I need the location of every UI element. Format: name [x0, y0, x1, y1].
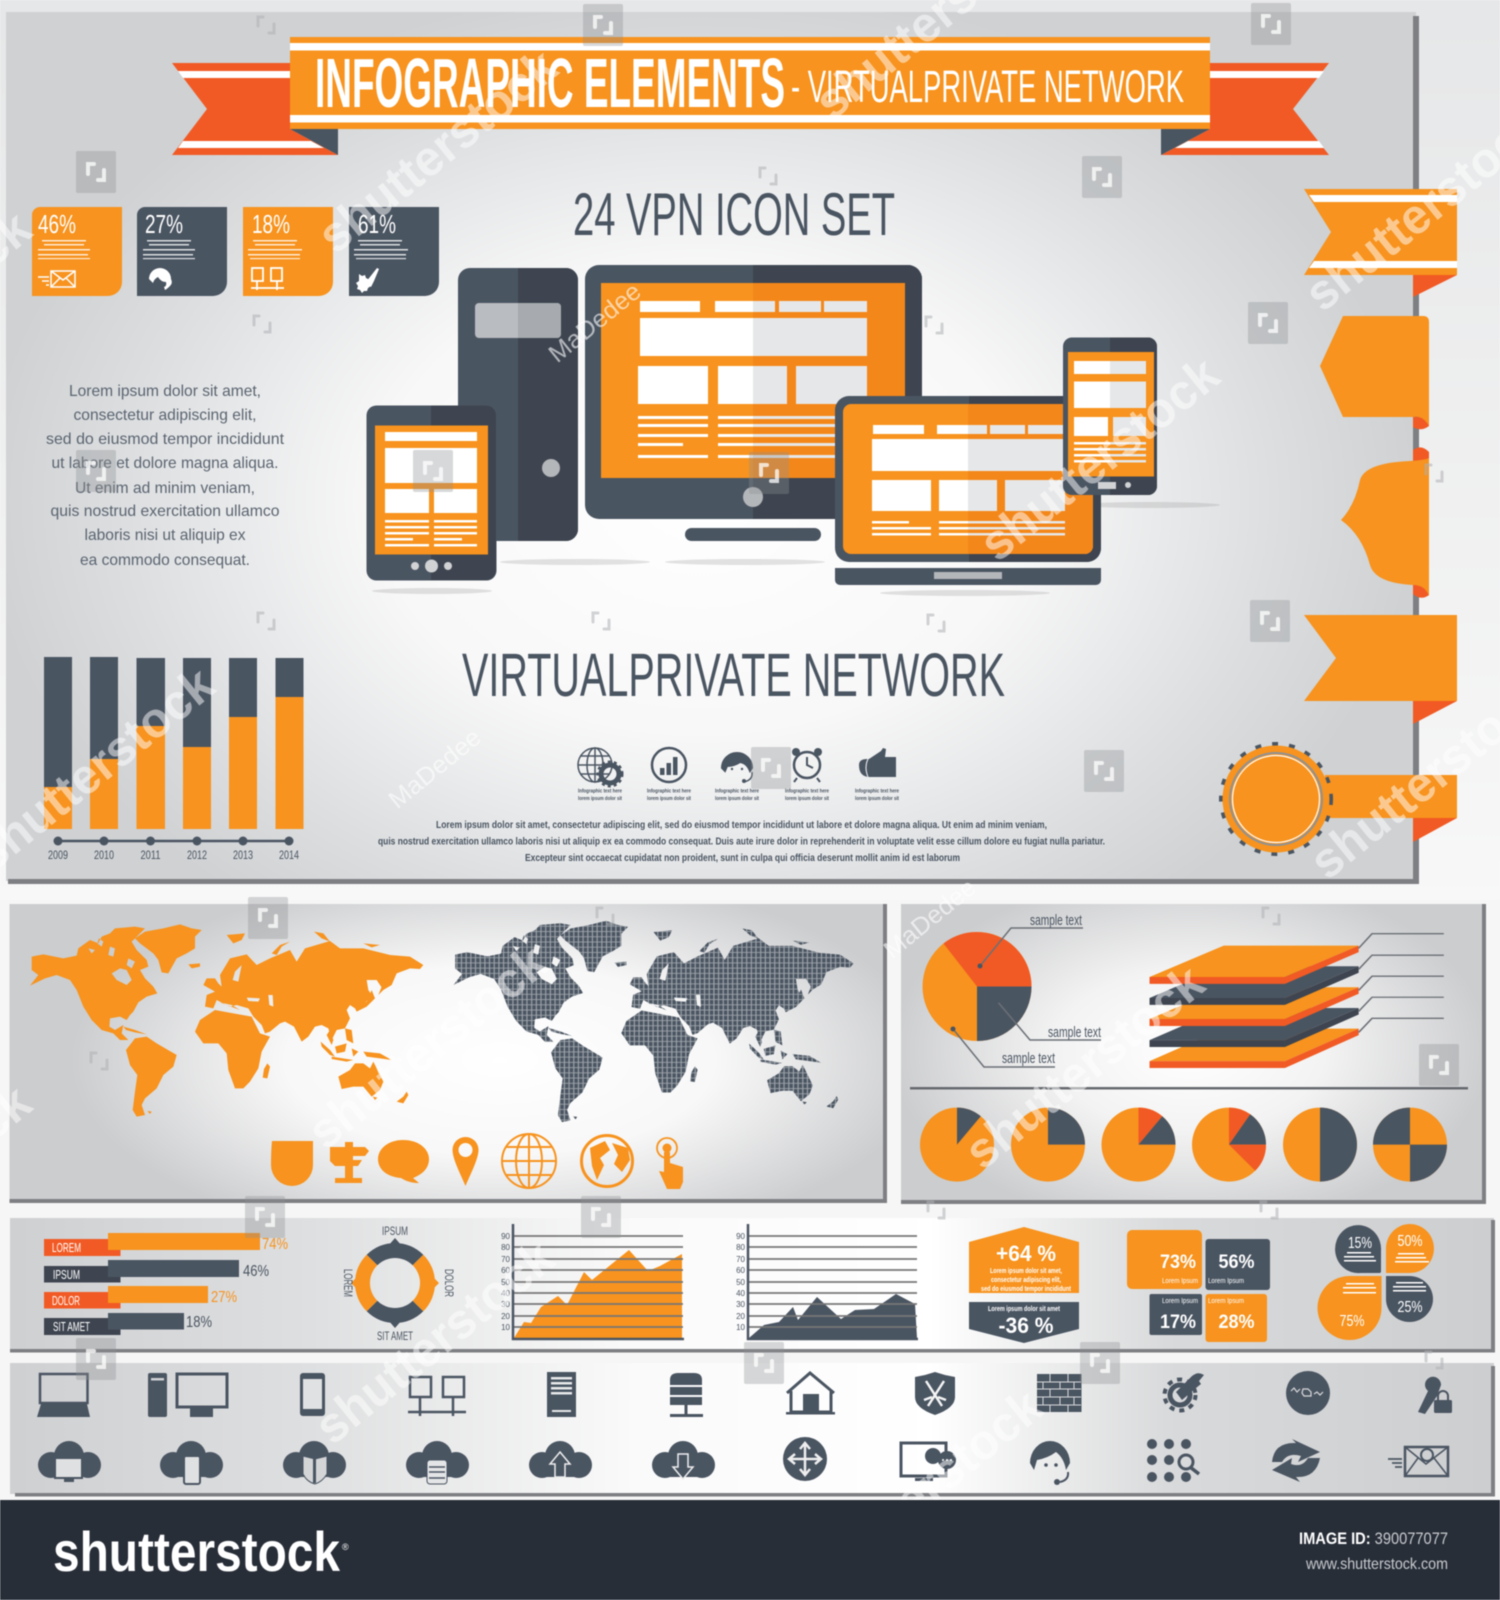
horizontal bar chart: 18% — [186, 1314, 212, 1331]
area chart dark: 20 — [736, 1312, 746, 1321]
icon: cloud download — [652, 1441, 715, 1479]
quad percent cards: 28% — [1218, 1312, 1255, 1333]
icon captions: Infographic text here — [785, 788, 829, 794]
site url: www.shutterstock.com — [1305, 1556, 1448, 1573]
panel: world maps — [10, 904, 887, 1203]
area chart orange: 80 — [501, 1243, 511, 1252]
up/down tags: Lorem ipsum dolor sit amet — [988, 1306, 1061, 1313]
icon: email sending — [1388, 1447, 1448, 1476]
ring diagram: SIT AMET — [377, 1329, 413, 1343]
card 61%: 61% — [358, 209, 396, 239]
orange world map — [30, 924, 423, 1117]
watermark stamps — [76, 3, 1459, 1384]
area chart dark: 30 — [736, 1300, 746, 1309]
icon captions — [578, 788, 899, 802]
petal percent diagram — [1318, 1224, 1434, 1340]
stacked bar chart — [44, 657, 304, 862]
area chart orange — [501, 1224, 684, 1339]
icon captions: lorem ipsum dolor sit — [785, 796, 829, 802]
text block: intro lorem: ea commodo consequat. — [80, 552, 250, 569]
ring diagram — [341, 1224, 456, 1343]
horizontal bar chart: IPSUM — [53, 1267, 80, 1282]
side ribbons — [1221, 189, 1457, 854]
icon captions: lorem ipsum dolor sit — [578, 796, 622, 802]
area chart dark: 10 — [736, 1323, 746, 1332]
icon: bar chart in circle — [652, 748, 686, 782]
icon: speech bubble — [378, 1140, 429, 1183]
monitor — [585, 265, 922, 541]
layered stack chart — [1150, 934, 1444, 1068]
hexagon tag — [1320, 316, 1429, 429]
shutterstock watermarks: shutterstock — [792, 1378, 1053, 1600]
card 27%: 27% — [145, 209, 183, 239]
area chart orange: 70 — [501, 1255, 511, 1264]
text block: intro lorem: ut labore et dolore magna aliqua. — [52, 455, 278, 472]
ribbon right tail — [1161, 63, 1329, 155]
contributor watermarks: MaDedee — [543, 277, 647, 368]
area chart dark: 40 — [736, 1289, 746, 1298]
text block: intro lorem: sed do eiusmod tempor incididunt — [46, 431, 285, 448]
contributor watermarks: MaDedee — [383, 723, 487, 814]
icon: earth globe — [582, 1136, 632, 1186]
phone — [1063, 338, 1157, 495]
stat cards — [32, 207, 439, 296]
quad percent cards: Lorem Ipsum — [1162, 1278, 1198, 1285]
panel: icon set — [10, 1363, 1495, 1496]
area chart dark: 70 — [736, 1255, 746, 1264]
text block: intro lorem: Lorem ipsum dolor sit amet, — [69, 383, 261, 400]
ribbon band — [290, 37, 1210, 129]
icon: rack server — [670, 1373, 703, 1417]
icon: desktop — [148, 1373, 227, 1417]
icon: orange drop — [271, 1141, 313, 1186]
quad percent cards: 56% — [1218, 1252, 1255, 1273]
icon captions: lorem ipsum dolor sit — [715, 796, 759, 802]
heading: virtual private network: VIRTUALPRIVATE NETWORK — [462, 641, 1005, 709]
footer logo: ® — [342, 1542, 349, 1552]
icon row with captions — [578, 748, 899, 802]
up/down tags: consectetur adipiscing elit, — [991, 1277, 1061, 1284]
ribbon left tail — [172, 63, 338, 155]
petal percent diagram: 25% — [1398, 1299, 1422, 1316]
quad percent cards: Lorem Ipsum — [1162, 1298, 1198, 1305]
quad percent cards: 17% — [1160, 1312, 1196, 1333]
dotted world map — [454, 921, 854, 1122]
card 18% — [243, 207, 333, 296]
horizontal bar chart: SIT AMET — [53, 1319, 90, 1334]
icon: support agent — [722, 753, 752, 783]
panel: charts — [901, 904, 1486, 1204]
icon captions: Infographic text here — [855, 788, 899, 794]
desktop tower — [458, 268, 578, 541]
horizontal bar chart — [44, 1233, 288, 1335]
petal percent diagram: 75% — [1340, 1313, 1364, 1330]
icon: monitor chat — [901, 1443, 956, 1481]
pie callouts: sample text — [1030, 912, 1083, 929]
icon: laptop — [37, 1374, 90, 1417]
card 46% — [32, 207, 122, 296]
text block: intro lorem: consectetur adipiscing elit, — [74, 407, 256, 424]
heading: 24 VPN icon set: 24 VPN ICON SET — [573, 181, 895, 248]
text block: bottom paragraph: Excepteur sint occaecat cupidatat non proident, sunt in culpa qui officia deserunt mollit anim id est laborum — [525, 853, 960, 864]
icon: cloud server — [406, 1441, 469, 1484]
text block: intro lorem: quis nostrud exercitation ullamco — [50, 503, 280, 520]
text block: intro lorem: laboris nisi ut aliquip ex — [84, 527, 246, 544]
device shadows — [372, 502, 1220, 596]
area chart dark: 50 — [736, 1278, 746, 1287]
horizontal bar chart: 74% — [262, 1236, 288, 1253]
shutterstock watermarks: shutterstock — [304, 1229, 565, 1455]
area chart orange: 60 — [501, 1266, 511, 1275]
petal percent diagram: 50% — [1398, 1233, 1422, 1250]
icon: server tower — [547, 1372, 576, 1417]
icon: smartphone — [300, 1373, 325, 1416]
card 27% — [137, 207, 227, 296]
quad percent cards: Lorem Ipsum — [1208, 1298, 1244, 1305]
laptop — [835, 396, 1101, 585]
up/down tags: sed do eiusmod tempor incididunt — [981, 1286, 1072, 1293]
timeline — [54, 836, 294, 846]
icon: brick firewall — [1037, 1374, 1082, 1412]
icon: disc with chain — [1286, 1371, 1330, 1415]
year labels: 2011 — [140, 848, 161, 862]
icon captions: lorem ipsum dolor sit — [855, 796, 899, 802]
area chart orange: 50 — [501, 1278, 511, 1287]
text block: intro lorem — [46, 383, 285, 569]
title ribbon — [172, 37, 1329, 155]
icon: thumbs up — [859, 748, 896, 777]
main pie — [922, 932, 1032, 1041]
text block: bottom paragraph — [378, 820, 1105, 864]
bars — [44, 657, 304, 829]
card 61% — [349, 207, 439, 296]
up/down tags: +64 % — [996, 1241, 1056, 1266]
icon: house — [786, 1373, 835, 1414]
horizontal bar chart: LOREM — [52, 1240, 81, 1255]
footer bar — [0, 1500, 1500, 1600]
ring diagram: LOREM — [341, 1269, 355, 1297]
subtitle text: - VIRTUALPRIVATE NETWORK — [791, 61, 1184, 112]
plain ribbon — [1304, 615, 1457, 724]
shutterstock watermarks: shutterstock — [969, 346, 1230, 572]
up/down tags: Lorem ipsum dolor sit amet, — [990, 1268, 1062, 1275]
area chart orange: 10 — [501, 1323, 511, 1332]
icon: keys and lock — [1418, 1377, 1452, 1414]
ring diagram: IPSUM — [382, 1224, 408, 1238]
panel: stats row — [10, 1218, 1495, 1352]
horizontal bar chart: DOLOR — [52, 1293, 80, 1308]
pie callouts: sample text — [1048, 1024, 1102, 1041]
year labels: 2009 — [48, 848, 68, 862]
contributor watermarks: MaDedee — [878, 873, 982, 964]
card 46%: 46% — [38, 209, 76, 239]
scalloped badge — [1221, 744, 1331, 854]
year labels: 2010 — [94, 848, 114, 862]
icon: cloud upload — [529, 1441, 592, 1478]
card 18%: 18% — [252, 209, 290, 239]
icon: headset agent — [1030, 1441, 1070, 1485]
quad percent cards — [1127, 1230, 1270, 1342]
curved tag — [1341, 447, 1429, 598]
up/down tags — [969, 1227, 1079, 1343]
icon: four-way arrows — [783, 1437, 827, 1481]
shutterstock watermarks: shutterstock — [297, 934, 558, 1160]
year labels: 2012 — [187, 848, 207, 862]
petal percent diagram: 15% — [1348, 1235, 1372, 1252]
pie row — [920, 1108, 1447, 1182]
pie callouts: sample text — [1002, 1050, 1056, 1067]
icon: map pin — [452, 1137, 478, 1186]
device group — [366, 265, 1220, 596]
area chart dark: 90 — [736, 1232, 746, 1241]
icon captions: Infographic text here — [578, 788, 622, 794]
area chart orange: 20 — [501, 1312, 511, 1321]
icon: linked computers — [408, 1377, 466, 1416]
title text: INFOGRAPHIC ELEMENTS — [315, 44, 785, 122]
quad percent cards: 73% — [1160, 1252, 1196, 1273]
icon: dots with magnifier — [1147, 1439, 1199, 1482]
text block: bottom paragraph: quis nostrud exercitation ullamco laboris nisi ut aliquip ex ea commodo consequat. Duis aute irure dolor in reprehenderit in voluptate velit esse cillum dolore eu fugiat nulla pariatur. — [378, 836, 1105, 848]
icon captions: Infographic text here — [647, 788, 691, 794]
icon: refresh arrows — [1272, 1439, 1320, 1482]
icon captions: lorem ipsum dolor sit — [647, 796, 691, 802]
icon: wrench and gear — [1164, 1373, 1204, 1410]
area chart orange: 30 — [501, 1300, 511, 1309]
icon: cloud monitor — [38, 1441, 101, 1482]
area chart dark — [736, 1224, 918, 1339]
horizontal bar chart: 46% — [243, 1263, 269, 1280]
icon: alarm clock — [792, 748, 822, 782]
image id: IMAGE ID: 390077077 — [1299, 1529, 1448, 1548]
icon captions: Infographic text here — [715, 788, 759, 794]
area chart orange: 90 — [501, 1232, 511, 1241]
striped ribbon — [1304, 189, 1457, 297]
area chart orange: 40 — [501, 1289, 511, 1298]
pie callouts — [950, 912, 1102, 1067]
icon: cloud phone — [160, 1441, 223, 1484]
year labels: 2013 — [233, 848, 253, 862]
icon: signpost — [330, 1142, 369, 1183]
badge ribbon — [1325, 775, 1457, 842]
tablet — [366, 406, 496, 580]
year labels — [48, 848, 299, 862]
icon: globe with gear — [578, 748, 622, 786]
text block: bottom paragraph: Lorem ipsum dolor sit amet, consectetur adipiscing elit, sed do eiusmod tempor incididunt ut labore et dolore magna aliqua. Ut enim ad minim veniam, — [436, 820, 1047, 831]
shutterstock watermarks: shutterstock — [954, 954, 1215, 1180]
up/down tags: -36 % — [998, 1313, 1054, 1338]
footer logo: shutterstock — [53, 1520, 341, 1583]
ring diagram: DOLOR — [442, 1269, 456, 1297]
icon: wireframe globe — [502, 1134, 556, 1188]
shutterstock watermarks: shutterstock — [307, 38, 568, 264]
quad percent cards: Lorem Ipsum — [1208, 1278, 1244, 1285]
year labels: 2014 — [279, 848, 299, 862]
text block: intro lorem: Ut enim ad minim veniam, — [75, 480, 255, 497]
panel: top hero — [0, 0, 1500, 900]
area chart dark: 80 — [736, 1243, 746, 1252]
horizontal bar chart: 27% — [211, 1289, 237, 1306]
area chart dark: 60 — [736, 1266, 746, 1275]
icon: shield — [915, 1372, 955, 1415]
icon: touch hand — [657, 1138, 683, 1189]
icon: cloud shield — [283, 1441, 346, 1484]
contributor watermarks — [383, 277, 982, 964]
